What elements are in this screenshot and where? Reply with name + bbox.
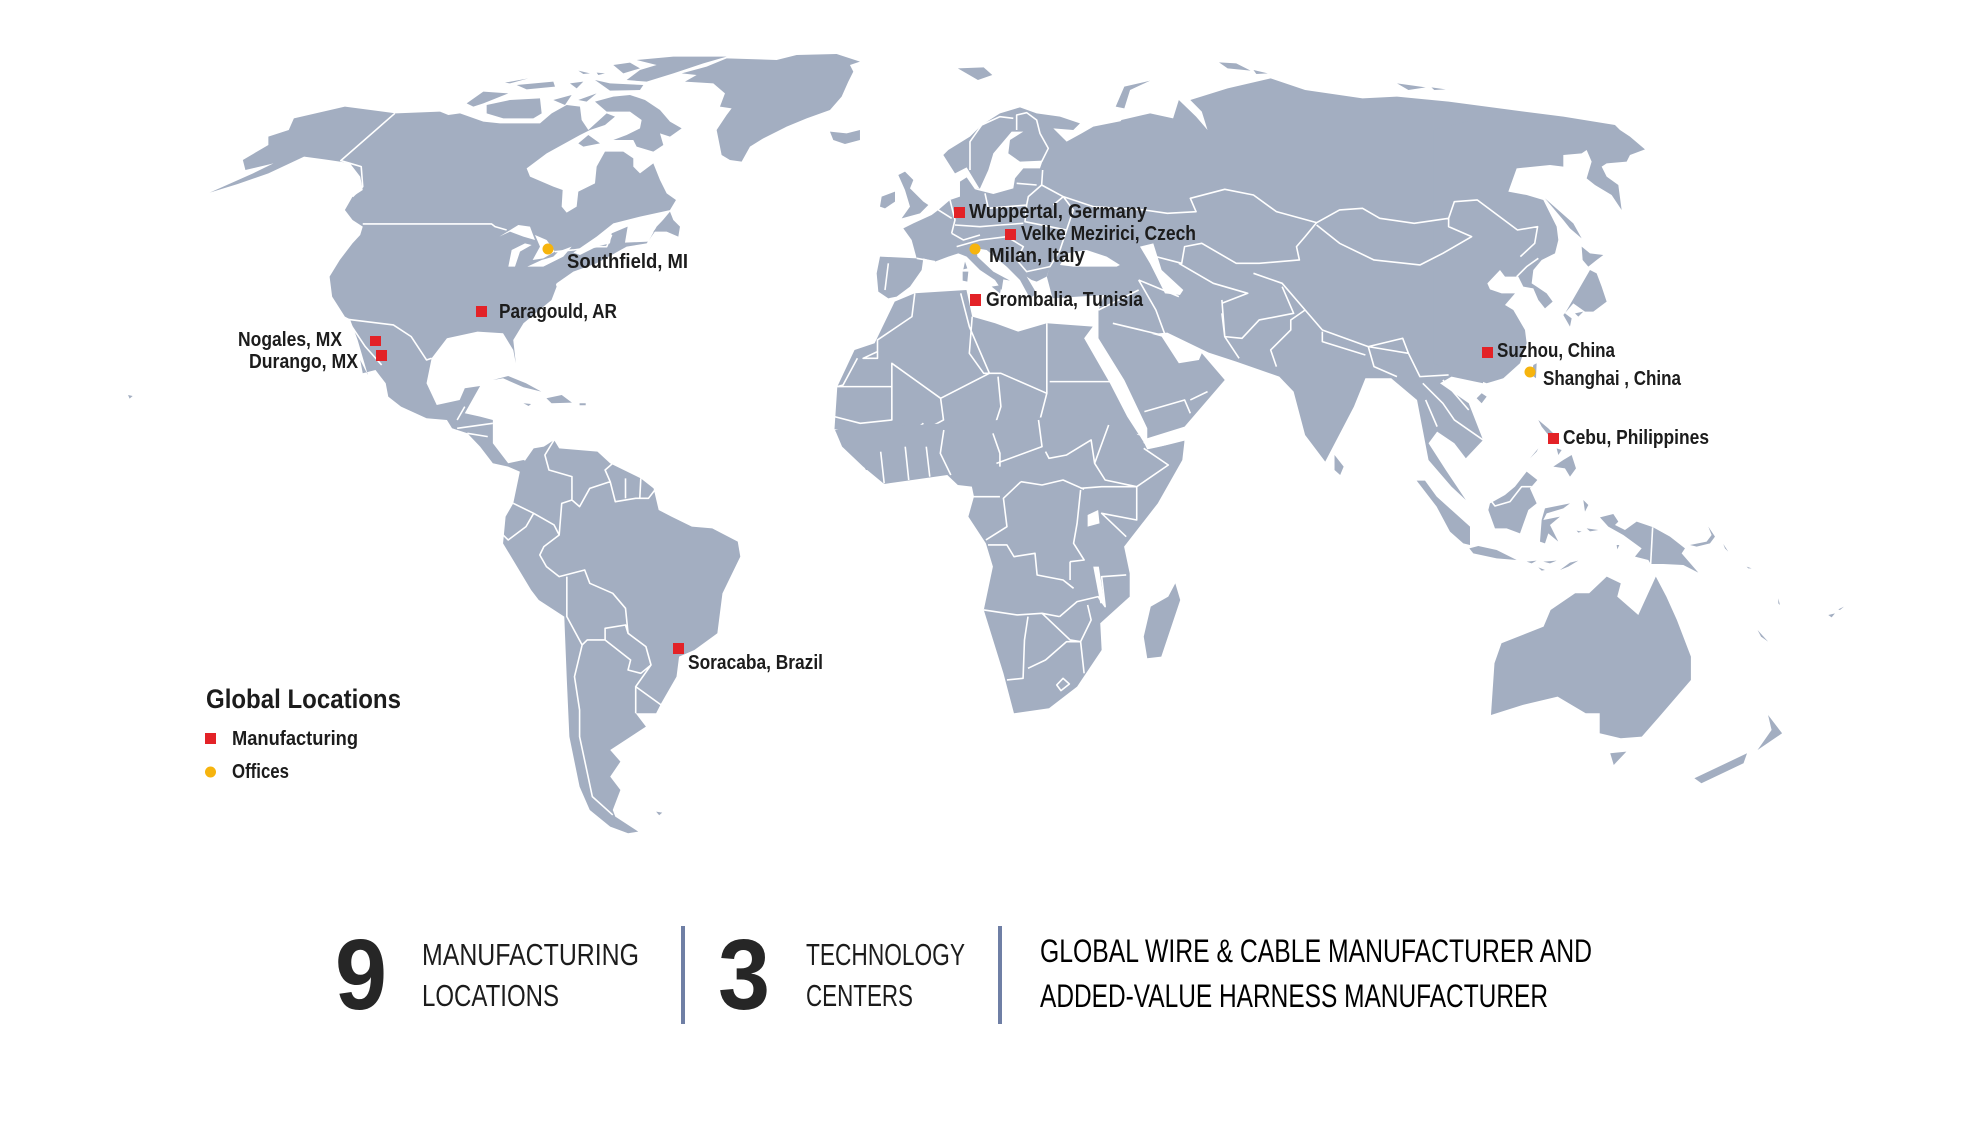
central and southern Asia bbox=[1047, 78, 1512, 500]
Australia bbox=[1491, 577, 1691, 738]
Canada, Greenland and Arctic islands bbox=[440, 54, 860, 290]
marker and label: Suzhou, China: Suzhou, China bbox=[1497, 340, 1616, 362]
Lesotho bbox=[1057, 678, 1069, 691]
stat: 9 manufacturing locations bbox=[335, 919, 639, 1031]
Arctic Russian islands bbox=[1219, 62, 1446, 90]
Falkland Islands bbox=[656, 812, 662, 815]
company description bbox=[1040, 933, 1592, 1014]
Sumatra bbox=[1417, 481, 1470, 545]
stat: 9 manufacturing locations: LOCATIONS bbox=[422, 978, 559, 1013]
North Korea border bbox=[1517, 258, 1538, 277]
Philippines bbox=[1530, 420, 1576, 477]
legend item: manufacturing: Manufacturing bbox=[232, 728, 358, 750]
northern Africa bbox=[834, 290, 1185, 477]
landmass: Eurasia bbox=[877, 62, 1645, 500]
legend item: offices bbox=[205, 761, 289, 783]
Europe and Scandinavia bbox=[877, 107, 1183, 298]
marker and label: Velke Mezirici, Czech: Velke Mezirici, Czech bbox=[1021, 223, 1196, 245]
company description: GLOBAL WIRE & CABLE MANUFACTURER AND bbox=[1040, 933, 1592, 969]
Corsica, Sardinia and Sicily bbox=[963, 262, 1002, 293]
East Asia bbox=[1433, 110, 1645, 403]
divider bbox=[998, 926, 1002, 1024]
marker and label: Milan, Italy: Milan, Italy bbox=[989, 245, 1086, 267]
marker and label: Southfield, MI bbox=[542, 244, 688, 273]
Indonesia, Philippines and New Guinea bbox=[1417, 420, 1844, 617]
South American borders bbox=[503, 440, 661, 815]
Black Sea bbox=[1060, 250, 1120, 267]
Caspian Sea bbox=[1140, 243, 1183, 295]
Baltic Sea bbox=[975, 132, 1043, 194]
marker and label: Wuppertal, Germany: Wuppertal, Germany bbox=[969, 201, 1148, 223]
legend title: Global Locations bbox=[206, 684, 401, 714]
Arctic islands bbox=[467, 57, 727, 152]
Canada and US eastern border bbox=[440, 224, 612, 252]
legend item: offices: Offices bbox=[232, 761, 289, 783]
marker and label: Shanghai, China: Shanghai , China bbox=[1543, 368, 1682, 390]
Great Britain bbox=[898, 172, 928, 218]
statistics band bbox=[335, 919, 1592, 1031]
Lesser Sunda Islands bbox=[1527, 561, 1578, 571]
Greenland bbox=[682, 54, 860, 162]
marker and label: Soracaba, Brazil: Soracaba, Brazil bbox=[688, 652, 823, 674]
landmass: South America bbox=[503, 440, 740, 833]
marker group: locations bbox=[238, 201, 1709, 674]
Maluku and Ceram bbox=[1577, 500, 1619, 549]
divider bbox=[681, 926, 685, 1024]
Gulf of St Lawrence bbox=[573, 209, 673, 255]
Madagascar bbox=[1144, 583, 1180, 658]
stat: 9 manufacturing locations: MANUFACTURING bbox=[422, 937, 639, 972]
New Guinea bbox=[1600, 514, 1698, 573]
stat: 3 technology centers: CENTERS bbox=[806, 978, 913, 1013]
southern Africa bbox=[835, 413, 1184, 713]
landmass: Africa bbox=[834, 290, 1185, 713]
Hainan bbox=[1477, 393, 1487, 403]
Lake Malawi bbox=[1093, 567, 1104, 603]
Sulawesi bbox=[1540, 503, 1570, 543]
Ireland bbox=[880, 192, 895, 208]
New Britain and Solomon Islands bbox=[1690, 527, 1844, 617]
stat: 3 technology centers: TECHNOLOGY bbox=[806, 937, 965, 972]
marker and label: Cebu, Philippines: Cebu, Philippines bbox=[1563, 427, 1709, 449]
legend bbox=[205, 684, 401, 783]
Iceland bbox=[830, 130, 860, 144]
company description: ADDED-VALUE HARNESS MANUFACTURER bbox=[1040, 978, 1548, 1014]
Taiwan bbox=[1532, 363, 1537, 378]
Asian borders and Arctic islands bbox=[958, 62, 1538, 440]
Borneo bbox=[1488, 472, 1537, 533]
landmass: North America bbox=[128, 54, 860, 473]
marker and label: Durango, MX: Durango, MX bbox=[249, 351, 359, 373]
Tasmania bbox=[1610, 752, 1626, 765]
Lake Victoria bbox=[1088, 510, 1100, 527]
New Caledonia bbox=[1758, 630, 1768, 642]
Great Lakes bbox=[499, 225, 572, 267]
marker and label: Nogales, MX: Nogales, MX bbox=[238, 329, 343, 351]
Sakhalin bbox=[1545, 198, 1582, 238]
marker and label: Grombalia, Tunisia: Grombalia, Tunisia bbox=[986, 289, 1144, 311]
Sri Lanka, Australia and New Zealand bbox=[1335, 455, 1782, 783]
Japan bbox=[1563, 247, 1607, 327]
stat: 3 technology centers bbox=[718, 919, 965, 1031]
Novaya Zemlya bbox=[1116, 81, 1150, 108]
stat: 3 technology centers: 3 bbox=[718, 919, 770, 1031]
New Zealand bbox=[1694, 715, 1782, 783]
western North America, United States and Mexico bbox=[128, 107, 586, 473]
Sri Lanka bbox=[1335, 455, 1344, 475]
world map bbox=[128, 54, 1844, 833]
marker and label: Soracaba, Brazil bbox=[673, 643, 823, 674]
Arabian Peninsula bbox=[1098, 323, 1225, 438]
Java bbox=[1469, 546, 1517, 560]
marker and label: Southfield, MI: Southfield, MI bbox=[567, 251, 688, 273]
Svalbard bbox=[958, 67, 992, 80]
European borders bbox=[885, 113, 1093, 290]
Newfoundland bbox=[653, 212, 680, 237]
stat: 9 manufacturing locations: 9 bbox=[335, 919, 387, 1031]
landmass: Southeast Asia and Oceania bbox=[1335, 420, 1844, 783]
marker and label: Paragould, AR: Paragould, AR bbox=[499, 301, 617, 323]
